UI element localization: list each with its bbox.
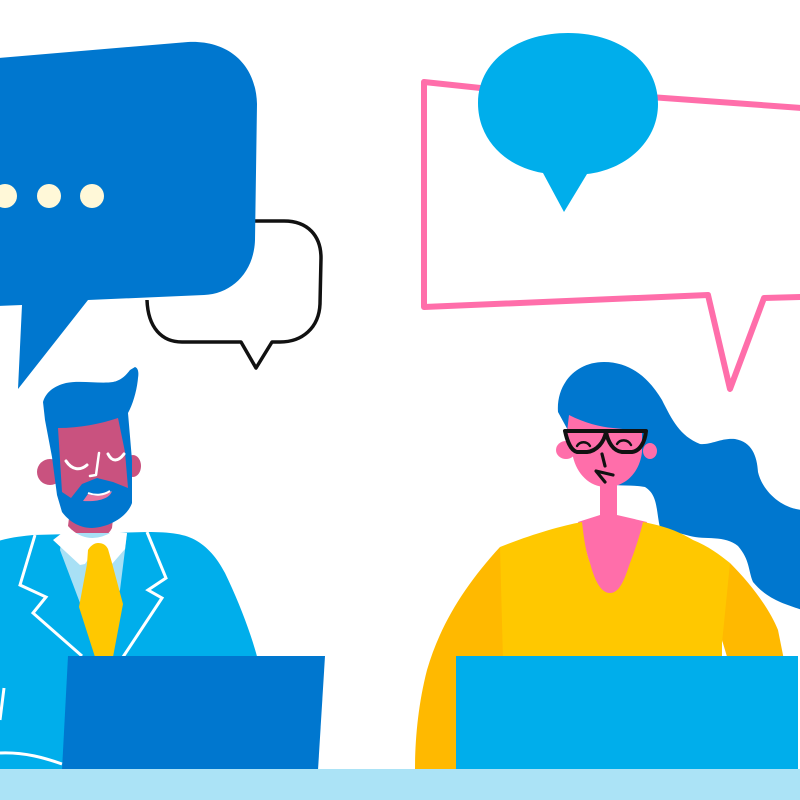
speech bubble: pink outline [424,82,800,389]
woman: hair [558,362,800,610]
woman [415,362,800,770]
man: ears [37,455,141,485]
woman: sleeves [415,547,784,770]
speech bubble: large blue with dots [0,42,257,389]
man: jacket [0,532,258,770]
man [0,367,258,770]
speech bubble: black outline [147,221,321,368]
man: tie [79,543,123,657]
man: hair and beard [43,367,138,528]
woman: nose and mouth [596,454,613,482]
man: lapels [20,532,166,657]
man: face [58,418,128,498]
man: mouth [83,491,112,501]
laptop: man [62,656,325,770]
woman: sweater [500,522,730,660]
man: collar [53,530,127,565]
man: neck [68,510,114,541]
speech bubble: cyan [478,33,658,212]
woman: ears [556,441,657,459]
man: sleeve lines [0,688,62,764]
woman: eyes [577,440,631,446]
man: nose [90,453,99,476]
man: eyes [66,454,124,469]
laptop: woman [456,656,798,770]
woman: neck and chest [578,478,647,600]
woman: glasses [565,431,646,452]
table [0,769,800,800]
typing dots [0,184,104,208]
woman: face [567,415,642,487]
man: shirt [60,533,127,640]
